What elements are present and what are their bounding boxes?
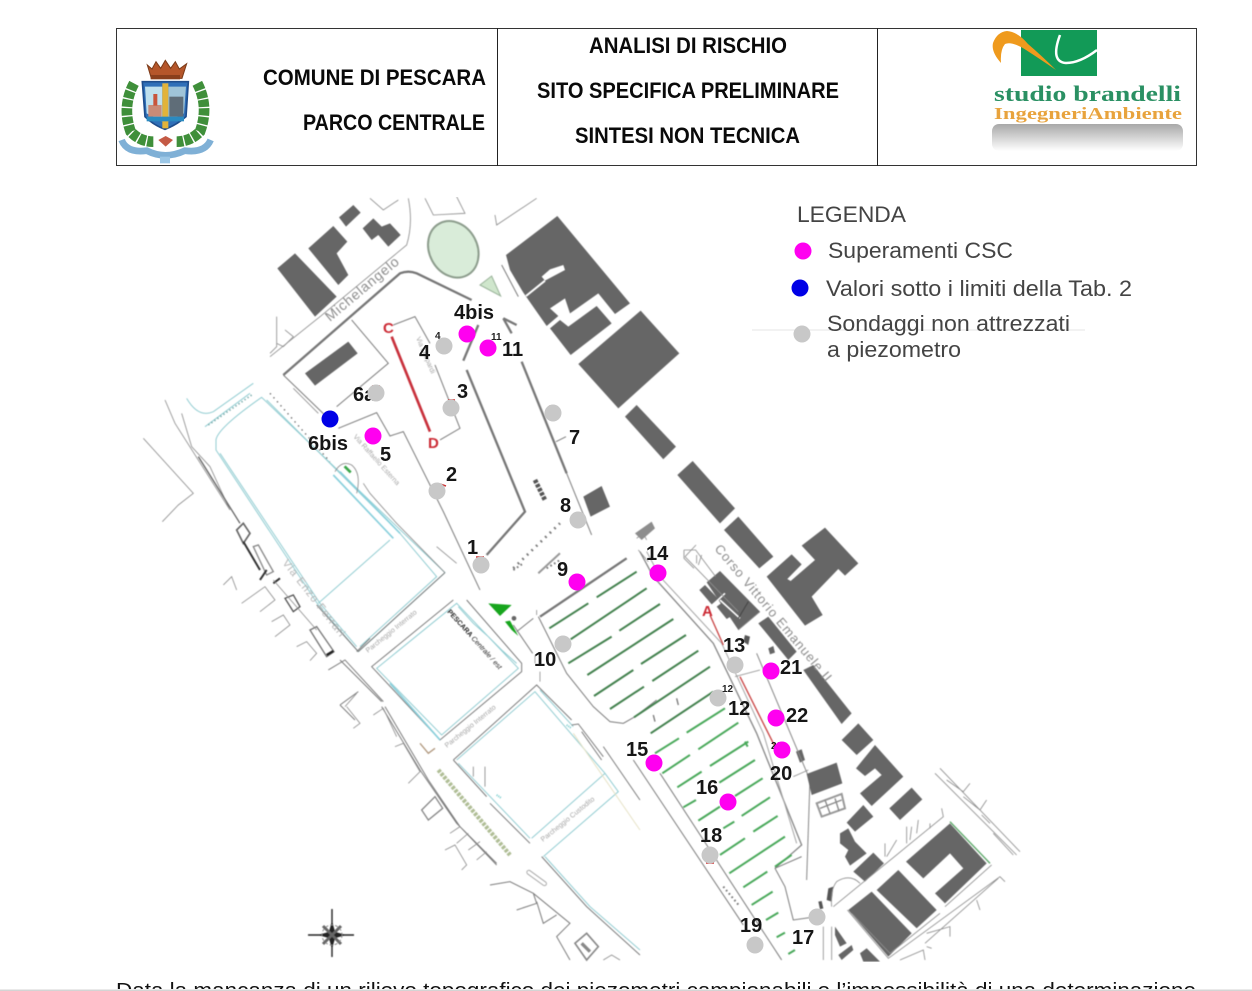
street names: Via Leopardi: [414, 336, 436, 375]
red section letters: C: [383, 320, 394, 337]
heading: analisi: ANALISI DI RISCHIO: [589, 33, 787, 58]
central east buildings: [677, 461, 858, 630]
street names: Parcheggio Custodito: [540, 796, 596, 844]
lots 2 to 4, green triangles and south-west shore: [340, 600, 640, 960]
point labels: 8: [560, 495, 571, 517]
legend item: sondaggi: [794, 311, 1070, 362]
lot 1 and western shore: [143, 383, 457, 720]
street names: Via Raffaello Esterna: [352, 434, 401, 487]
street names: Via Enzo Ferrari: [280, 557, 348, 640]
point labels: 5: [380, 444, 391, 466]
point labels: 18: [700, 825, 722, 847]
south-east buildings: [807, 723, 1020, 962]
heading: comune: COMUNE DI PESCARA: [263, 65, 486, 90]
monitoring points: [322, 326, 826, 954]
point labels: 13: [723, 635, 745, 657]
point labels: 14: [646, 543, 669, 565]
north-west buildings and roads: [270, 197, 676, 590]
point labels: 22: [786, 705, 808, 727]
point labels: 4: [419, 342, 431, 364]
point labels: 2: [446, 464, 457, 486]
point labels under markers: 20: [771, 741, 783, 752]
park stripes and southern paths: [513, 522, 852, 960]
legend item: sondaggi: Sondaggi non attrezzati: [827, 311, 1070, 336]
heading: parco: PARCO CENTRALE: [303, 110, 485, 135]
legend item: superamenti: Superamenti CSC: [828, 238, 1013, 263]
point labels: 15: [626, 739, 648, 761]
header table: [116, 28, 1196, 166]
logo: studio brandelli: IngegneriAmbiente: [994, 104, 1183, 123]
point labels: 11: [502, 339, 523, 361]
logo: studio brandelli: [992, 30, 1183, 151]
point labels: 1: [467, 537, 478, 559]
logo: studio brandelli: studio brandelli: [994, 81, 1181, 106]
legend item: valori: Valori sotto i limiti della Tab. 2: [826, 276, 1132, 301]
red section letters: D: [428, 435, 439, 452]
point labels: 16: [696, 777, 718, 799]
point labels under markers: 6a: [353, 384, 376, 406]
point labels: [308, 302, 814, 949]
point labels: 17: [792, 927, 814, 949]
point labels: 4: [435, 331, 441, 342]
point labels: 11: [491, 332, 502, 343]
heading: sintesi: SINTESI NON TECNICA: [575, 123, 800, 148]
point labels: 12: [722, 684, 734, 695]
street names: PESCARA Centrale / est: [446, 609, 503, 672]
emblem: comune di Pescara: [122, 60, 211, 163]
red section letters: A: [702, 603, 713, 620]
point labels: 3: [457, 381, 468, 403]
street names: Parcheggio Interrato: [444, 704, 498, 750]
street names: [280, 253, 836, 844]
point labels: 7: [569, 427, 580, 449]
point labels: 9: [557, 559, 568, 581]
point labels: 4bis: [454, 302, 494, 324]
northern large buildings: [502, 216, 679, 408]
legend title: LEGENDA: [797, 202, 906, 227]
street names: Michelangelo: [322, 253, 402, 324]
point labels: 21: [780, 657, 802, 679]
point labels: 19: [740, 915, 762, 937]
red section letters: [383, 320, 713, 620]
heading: sito: SITO SPECIFICA PRELIMINARE: [537, 78, 839, 103]
point labels: 6bis: [308, 433, 348, 455]
compass rose: [308, 909, 354, 957]
point labels: 12: [728, 698, 750, 720]
legend: [752, 202, 1132, 362]
street names: Parcheggio Interrato: [365, 609, 419, 655]
legend item: sondaggi: a piezometro: [827, 337, 961, 362]
street names: Corso Vittorio Emanuele II: [712, 541, 836, 685]
map: [143, 197, 1020, 962]
point labels: 20: [770, 763, 792, 785]
point labels: 10: [534, 649, 556, 671]
point labels under markers: [353, 384, 783, 752]
